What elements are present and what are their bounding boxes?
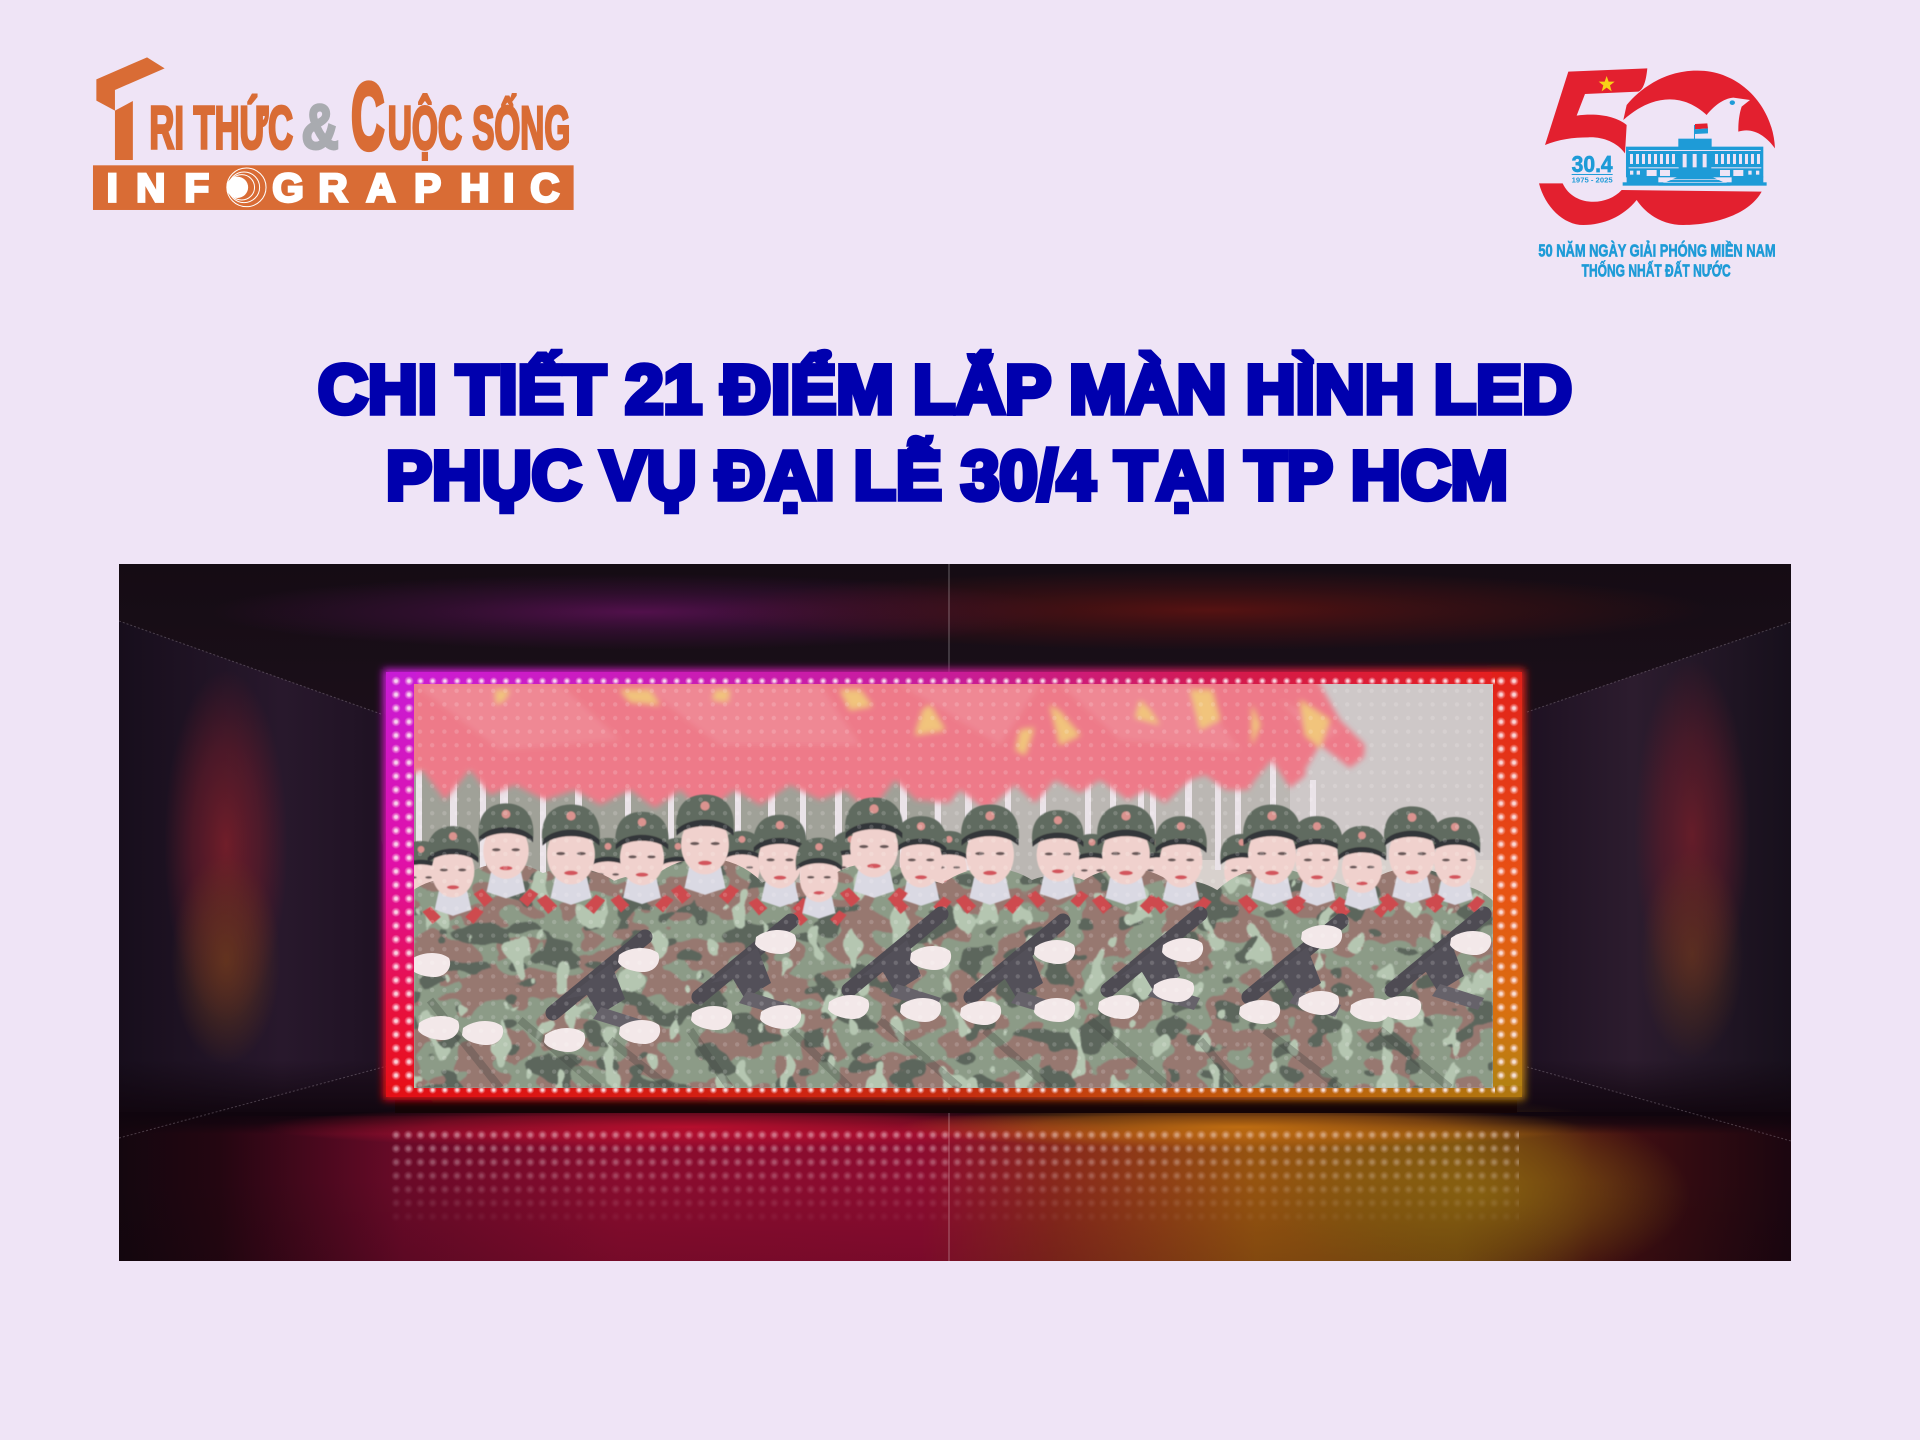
logo infographic banner: H [460,166,490,210]
LED frame glow [383,669,1525,1100]
logo: Tri Thức & Cuộc Sống Infographic [93,57,574,210]
logo infographic banner: C [530,166,560,210]
logo ampersand: & [302,91,339,163]
floor soft top edge [119,1112,1791,1134]
logo infographic banner: I [107,166,118,210]
photo backdrop [414,758,1493,1088]
numeral 5 upper [1545,68,1647,153]
stage floor [119,1116,1791,1261]
distant crowd blur [1195,860,1493,910]
logo wordmark: RI THỨC [149,94,293,161]
backdrop right pale grey [1290,684,1493,860]
yellow star [1599,76,1615,91]
backdrop left grey [414,770,934,883]
logo infographic banner: R [318,166,348,210]
floor orange edge glow [924,1113,1564,1146]
flagpoles [416,760,1316,880]
title [318,351,1572,514]
anniversary caption [1538,240,1776,281]
dark band behind the floor edge [119,1075,1791,1112]
left wall brown glow [178,886,274,1052]
soldiers back row [414,830,1252,914]
LED screen photo: marching soldiers [396,670,1500,1088]
anniversary caption: 50 NĂM NGÀY GIẢI PHÓNG MIỀN NAM [1538,240,1776,261]
left wall red glow [170,686,282,982]
logo T mark [96,57,165,160]
dove eye [1730,100,1735,105]
red flags [414,684,1368,810]
logo infographic banner [93,165,574,210]
title: CHI TIẾT 21 ĐIỂM LẮP MÀN HÌNH LED [318,351,1572,428]
uniform folds and leg shadows [430,1000,1450,1088]
LED dots [390,674,1520,1097]
white gloves [409,925,1491,1052]
numeral base bowl [1539,183,1762,225]
ceiling glow red [822,576,1636,644]
right wall brown glow [1650,889,1736,1042]
floor olive light pool [1380,1108,1672,1261]
LED dot overlay on photo [414,684,1493,1088]
screen pale wash [414,684,1493,1088]
right side wall [1530,630,1791,1082]
floor bottom shade [306,1214,1618,1261]
logo wordmark [149,64,570,169]
panel: LED stage [119,564,1791,1290]
numeral 0 upper with dove [1623,71,1775,148]
logo infographic banner: P [414,166,441,210]
ceiling glow magenta [286,580,962,644]
camouflage uniforms [414,840,1493,1088]
soldiers front row [422,795,1485,926]
date divider [1572,173,1613,176]
logo infographic banner: F [184,166,209,210]
logo: 50 năm ngày giải phóng [1538,68,1776,281]
left side wall [119,630,380,1076]
logo infographic banner: G [272,166,304,210]
floor LED reflection [390,1128,1519,1223]
palace building [1623,123,1767,186]
logo infographic banner: I [503,166,514,210]
stage back wall and ceiling [119,564,1791,1112]
wall perspective lines [119,621,1791,1141]
floor crimson edge glow [278,1112,1070,1146]
logo infographic banner: N [136,166,165,210]
right wall red glow [1641,679,1744,974]
date 30.4: 30.4 [1572,151,1613,177]
LED frame [386,672,1522,1097]
logo wordmark: C [351,64,384,169]
logo wordmark: SỐNG [472,94,570,161]
logo infographic banner: A [366,166,396,210]
years 1975 - 2025: 1975 - 2025 [1572,176,1613,185]
logo wordmark: UỘC [388,94,462,161]
rifles [553,914,1484,1033]
anniversary caption: THỐNG NHẤT ĐẤT NƯỚC [1582,260,1731,281]
vertical seam [948,564,950,1261]
title: PHỤC VỤ ĐẠI LỄ 30/4 TẠI TP HCM [386,437,1508,514]
frame shadow [395,1100,1517,1113]
